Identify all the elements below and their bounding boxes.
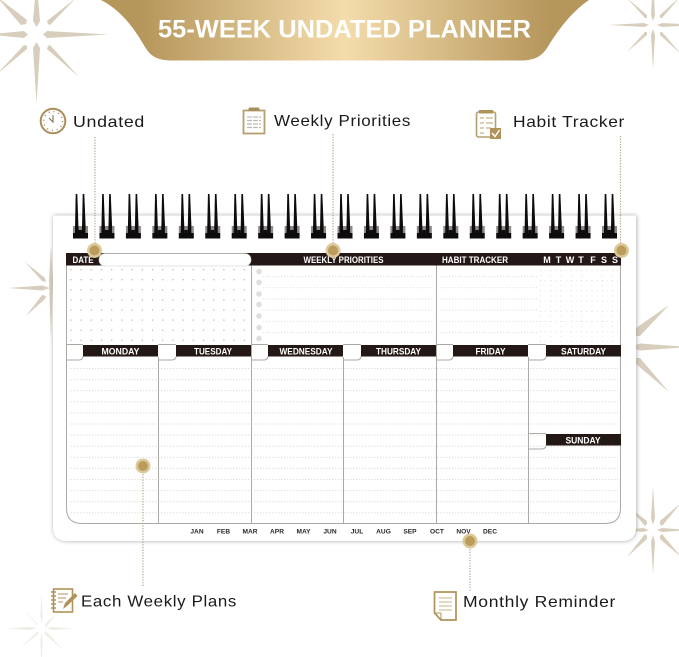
day: tuesday bbox=[159, 345, 251, 360]
icon: checklist bbox=[476, 110, 501, 139]
day: tuesday: TUESDAY bbox=[194, 346, 232, 356]
leader lines bottom bbox=[143, 466, 470, 591]
label: each weekly plans: Each Weekly Plans bbox=[81, 594, 237, 610]
page frame bbox=[66, 253, 620, 524]
month strip: MAR bbox=[242, 528, 258, 535]
month strip: JAN bbox=[190, 528, 204, 535]
icon: clock bbox=[41, 109, 65, 133]
day: wednesday: WEDNESDAY bbox=[280, 346, 332, 356]
month strip: OCT bbox=[430, 528, 444, 535]
month strip bbox=[190, 528, 497, 535]
habit lines bbox=[439, 276, 539, 342]
header: weekday initials: F bbox=[590, 255, 596, 265]
leader lines top bbox=[95, 134, 620, 250]
icon: notebook and pencil bbox=[51, 589, 78, 612]
ring 1 bbox=[73, 194, 88, 238]
planner page bbox=[66, 253, 621, 524]
header: weekday initials: T bbox=[578, 255, 584, 265]
star: top right bbox=[608, 0, 679, 69]
header: weekday initials: S bbox=[612, 255, 618, 265]
priorities lines bbox=[262, 276, 434, 342]
month strip: DEC bbox=[483, 528, 497, 535]
day: wednesday bbox=[252, 345, 343, 360]
month strip: JUL bbox=[351, 528, 363, 535]
day lines bbox=[69, 368, 618, 518]
label: undated: Undated bbox=[73, 114, 145, 131]
dot grid: notes bbox=[70, 269, 250, 343]
day: monday: MONDAY bbox=[102, 346, 140, 356]
header: weekday initials: W bbox=[566, 255, 575, 265]
month strip: MAY bbox=[296, 528, 311, 535]
spiral binding bbox=[73, 194, 617, 238]
day: monday bbox=[66, 345, 158, 360]
callout markers bbox=[87, 243, 629, 548]
header: weekday initials: T bbox=[556, 255, 562, 265]
day: thursday: THURSDAY bbox=[376, 346, 421, 356]
title: 55-WEEK UNDATED PLANNER bbox=[158, 16, 531, 44]
rings 2 to 21 bbox=[99, 194, 617, 238]
title banner bbox=[101, 0, 589, 60]
month strip: NOV bbox=[456, 528, 471, 535]
star: middle left bbox=[8, 246, 53, 340]
priority bullets bbox=[256, 269, 262, 341]
day: sunday: SUNDAY bbox=[566, 435, 600, 445]
star: bottom right bbox=[625, 487, 679, 574]
header: weekday initials: S bbox=[601, 255, 607, 265]
icon: document bbox=[434, 592, 456, 620]
label: monthly reminder: Monthly Reminder bbox=[463, 594, 616, 611]
label: habit tracker: Habit Tracker bbox=[513, 114, 625, 131]
month strip: AUG bbox=[376, 528, 391, 535]
date field bbox=[99, 254, 251, 266]
month strip: APR bbox=[270, 528, 284, 535]
star: bottom left faint bbox=[7, 592, 73, 657]
day: friday: FRIDAY bbox=[476, 346, 506, 356]
star: middle right bbox=[630, 305, 679, 392]
month strip: FEB bbox=[217, 528, 230, 535]
header: weekday initials: M bbox=[543, 255, 551, 265]
planner card bbox=[53, 216, 636, 541]
label: weekly priorities: Weekly Priorities bbox=[274, 113, 411, 130]
leader under card-top bbox=[95, 215, 620, 250]
day: thursday bbox=[344, 345, 436, 360]
header: weekly priorities: WEEKLY PRIORITIES bbox=[304, 255, 384, 265]
habit grid bbox=[540, 270, 618, 342]
day: saturday bbox=[529, 345, 621, 360]
header: weekday initials bbox=[543, 255, 618, 265]
header bar bbox=[66, 253, 621, 266]
month strip: SEP bbox=[403, 528, 417, 535]
callout: monthly reminder bbox=[434, 592, 616, 620]
callout: weekly priorities bbox=[244, 108, 411, 134]
icon: clipboard bbox=[244, 108, 264, 134]
header: date: DATE bbox=[72, 255, 94, 265]
callout: undated bbox=[41, 109, 145, 133]
header: habit tracker: HABIT TRACKER bbox=[442, 255, 508, 265]
month strip: JUN bbox=[323, 528, 337, 535]
callout: each weekly plans bbox=[51, 589, 237, 612]
star: top left bbox=[0, 0, 108, 104]
day: sunday bbox=[529, 434, 621, 449]
day: friday bbox=[437, 345, 528, 360]
day: saturday: SATURDAY bbox=[561, 346, 606, 356]
callout: habit tracker bbox=[476, 110, 625, 139]
